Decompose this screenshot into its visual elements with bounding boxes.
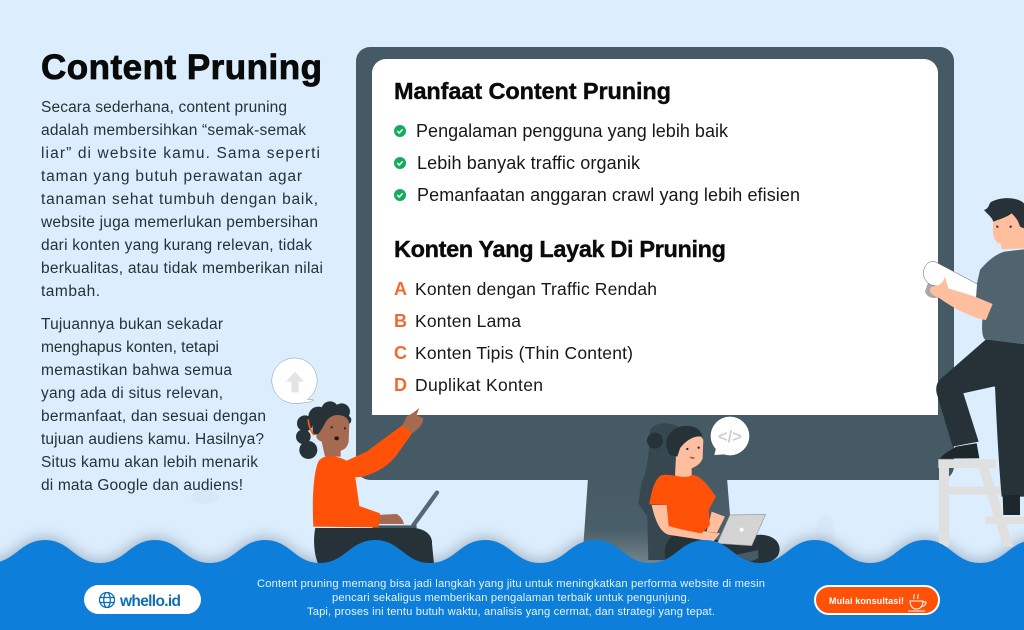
- text block: introduction paragraph: tanaman sehat tumbuh dengan baik,: [41, 191, 318, 208]
- face features: [686, 446, 700, 450]
- hair band: [308, 419, 314, 435]
- laptop logo: [740, 528, 744, 532]
- hair: [666, 426, 702, 457]
- faint background shapes: [191, 490, 834, 551]
- text block: purpose paragraph: tujuan audiens kamu. Hasilnya?: [41, 431, 264, 448]
- list item A: A: [394, 279, 407, 299]
- benefits checklist: [394, 121, 800, 205]
- list item B: B: [394, 311, 407, 331]
- text block: purpose paragraph: Situs kamu akan lebih menarik: [41, 454, 258, 471]
- list item A: Konten dengan Traffic Rendah: [415, 279, 657, 299]
- list item C: Konten Tipis (Thin Content): [415, 343, 633, 363]
- hair fringe: [313, 407, 349, 435]
- laptop: [413, 493, 437, 525]
- neck and face: [993, 211, 1024, 249]
- illustration: woman pointing with laptop: [272, 358, 437, 564]
- footer message: pencari sekaligus memberikan pengalaman terbaik untuk pengunjung.: [332, 592, 690, 604]
- text block: purpose paragraph: bermanfaat, dan sesuai dengan: [41, 408, 266, 425]
- text block: introduction paragraph: website juga memerlukan pembersihan: [40, 214, 318, 231]
- stepladder: [938, 459, 1024, 547]
- heading: benefits: Manfaat Content Pruning: [394, 78, 671, 104]
- text block: introduction paragraph: tambah.: [41, 283, 100, 300]
- shoe: [735, 550, 758, 563]
- heading: content to prune: Konten Yang Layak Di Pruning: [394, 236, 726, 262]
- front leg: [936, 339, 1024, 447]
- text block: introduction paragraph: taman yang butuh perawatan agar: [41, 168, 302, 185]
- title: Content Pruning: [41, 48, 322, 87]
- arms: [652, 505, 725, 542]
- benefit item 2: Lebih banyak traffic organik: [417, 153, 641, 173]
- orange t-shirt: [649, 475, 716, 533]
- footer message: Tapi, proses ini tentu butuh waktu, analisis yang cermat, dan strategi yang tepat.: [307, 606, 715, 618]
- shirt: [974, 249, 1024, 344]
- mouth: [334, 436, 339, 440]
- text block: purpose paragraph: Tujuannya bukan sekadar: [41, 316, 223, 333]
- list item C: C: [394, 343, 407, 363]
- text block: introduction paragraph: Secara sederhana, content pruning: [41, 99, 287, 116]
- laptop: [717, 514, 766, 546]
- text block: purpose paragraph: yang ada di situs relevan,: [41, 385, 223, 402]
- eyes: [996, 225, 1012, 228]
- front shoe: [940, 443, 979, 459]
- speech bubble with up arrow: [272, 358, 317, 403]
- illustration: seated woman with laptop: [638, 417, 780, 564]
- monitor stand: [582, 478, 734, 565]
- footer message: [257, 578, 765, 618]
- text block: introduction paragraph: [40, 99, 323, 300]
- hair bun: [647, 433, 663, 449]
- hand on laptop: [377, 514, 404, 524]
- wave shadow: [0, 538, 1024, 630]
- mouth: [689, 457, 695, 459]
- text block: purpose paragraph: menghapus konten, tetapi: [41, 339, 219, 356]
- orange sweater: [313, 425, 412, 527]
- call to action button: [815, 586, 939, 614]
- icon: coffee cup: [908, 594, 926, 611]
- text block: introduction paragraph: liar” di website kamu. Sama seperti: [41, 145, 320, 162]
- list item B: Konten Lama: [415, 311, 521, 331]
- logo text: whello.id: [119, 593, 181, 610]
- text block: purpose paragraph: di mata Google dan audiens!: [41, 477, 243, 494]
- text block: purpose paragraph: memastikan bahwa semua: [41, 362, 232, 379]
- hair: [984, 198, 1024, 228]
- neck and face: [673, 433, 703, 480]
- list item D: D: [394, 375, 407, 395]
- text block: purpose paragraph: [41, 316, 266, 494]
- list item D: Duplikat Konten: [415, 375, 543, 395]
- eyes: [330, 426, 346, 429]
- illustration: man on stepladder with scroll: [923, 198, 1024, 547]
- text block: introduction paragraph: dari konten yang kurang relevan, tidak: [41, 237, 312, 254]
- back shoe: [1003, 495, 1020, 515]
- legs: [665, 532, 780, 564]
- curly hair back: [296, 401, 351, 459]
- logo pill: [84, 585, 201, 614]
- benefit item 1: Pengalaman pengguna yang lebih baik: [416, 121, 729, 141]
- benefit item 3: Pemanfaatan anggaran crawl yang lebih efisien: [417, 185, 800, 205]
- footer message: Content pruning memang bisa jadi langkah yang jitu untuk meningkatkan performa website di mesin: [257, 578, 765, 590]
- speech bubble with code tag: [711, 417, 749, 455]
- text block: introduction paragraph: adalah membersihkan “semak-semak: [41, 122, 306, 139]
- back leg: [993, 347, 1024, 497]
- speech bubble with code tag: </>: [718, 427, 742, 446]
- button label: Mulai konsultasi!: [829, 596, 904, 606]
- chair: [638, 423, 713, 560]
- text block: introduction paragraph: berkualitas, atau tidak memberikan nilai: [41, 260, 323, 277]
- monitor body: [356, 47, 954, 480]
- monitor screen panel: [372, 59, 938, 415]
- scroll shadow: [925, 282, 940, 298]
- paper scroll: [923, 261, 977, 302]
- pointing hand: [403, 408, 423, 433]
- footer wave band: [0, 540, 1024, 630]
- prune list: [394, 279, 657, 395]
- face and neck: [316, 413, 349, 457]
- legs: [314, 528, 434, 564]
- globe icon: [100, 592, 114, 608]
- arm and hand: [930, 277, 993, 320]
